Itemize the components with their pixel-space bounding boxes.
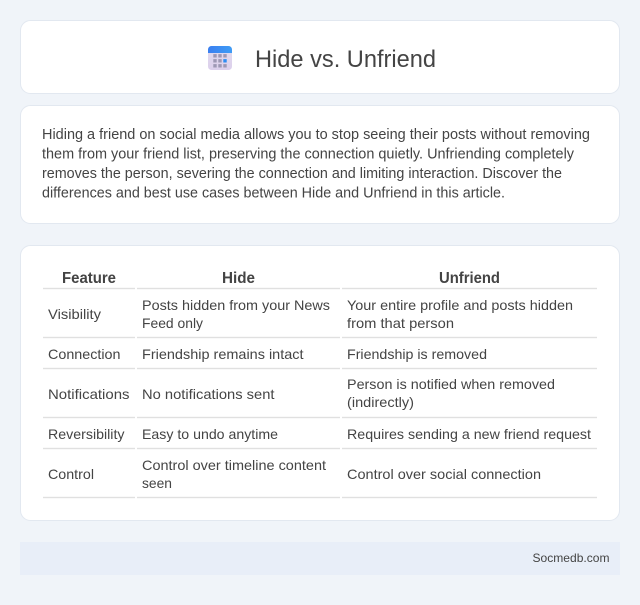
table: header row: Unfriend [439, 270, 500, 287]
footer bar [20, 542, 620, 575]
table row: visibility: from that person [347, 315, 454, 331]
table row: control: Control over social connection [347, 466, 541, 482]
text block: description: differences and best use cases between Hide and Unfriend in this article. [42, 186, 505, 202]
title: Hide vs. Unfriend [255, 46, 436, 73]
table row: connection: Friendship remains intact [142, 346, 304, 362]
table row: connection [48, 346, 487, 362]
table row: reversibility: Requires sending a new friend request [347, 426, 591, 442]
table row: notifications [48, 376, 555, 410]
table row: connection: Connection [48, 346, 120, 362]
table row: reversibility: Reversibility [48, 426, 124, 442]
table row: visibility [48, 297, 573, 331]
text block: description: Hiding a friend on social media allows you to stop seeing their posts without removing [42, 127, 590, 143]
table row: notifications: (indirectly) [347, 394, 414, 410]
icon: calendar [208, 46, 232, 70]
table row: reversibility [48, 426, 591, 442]
footer source text: Socmedb.com [532, 551, 610, 565]
table row: connection: Friendship is removed [347, 346, 487, 362]
table: header row: Feature [62, 270, 116, 287]
table: header row [62, 270, 500, 287]
table row: control: Control [48, 466, 94, 482]
table row: reversibility: Easy to undo anytime [142, 426, 278, 442]
table row: visibility: Visibility [48, 306, 101, 322]
panel: comparison table card [20, 246, 620, 520]
table row: notifications: Person is notified when removed [347, 376, 555, 392]
table row: visibility: Your entire profile and posts hidden [347, 297, 573, 313]
table: header row: Hide [222, 270, 255, 287]
table row: control [48, 457, 541, 491]
table row: control: seen [142, 475, 172, 491]
table row: control: Control over timeline content [142, 457, 326, 473]
table row: notifications: No notifications sent [142, 386, 275, 402]
text block: description: removes the person, severing the connection and limiting interaction. Discover the [42, 166, 562, 182]
text block: description [42, 127, 590, 202]
panel: title card [20, 20, 620, 94]
panel: description card [20, 106, 620, 224]
table row: visibility: Feed only [142, 315, 203, 331]
table row: visibility: Posts hidden from your News [142, 297, 330, 313]
text block: description: them from your friend list, preserving the connection quietly. Unfriending completely [42, 146, 575, 162]
table row: notifications: Notifications [48, 386, 130, 402]
